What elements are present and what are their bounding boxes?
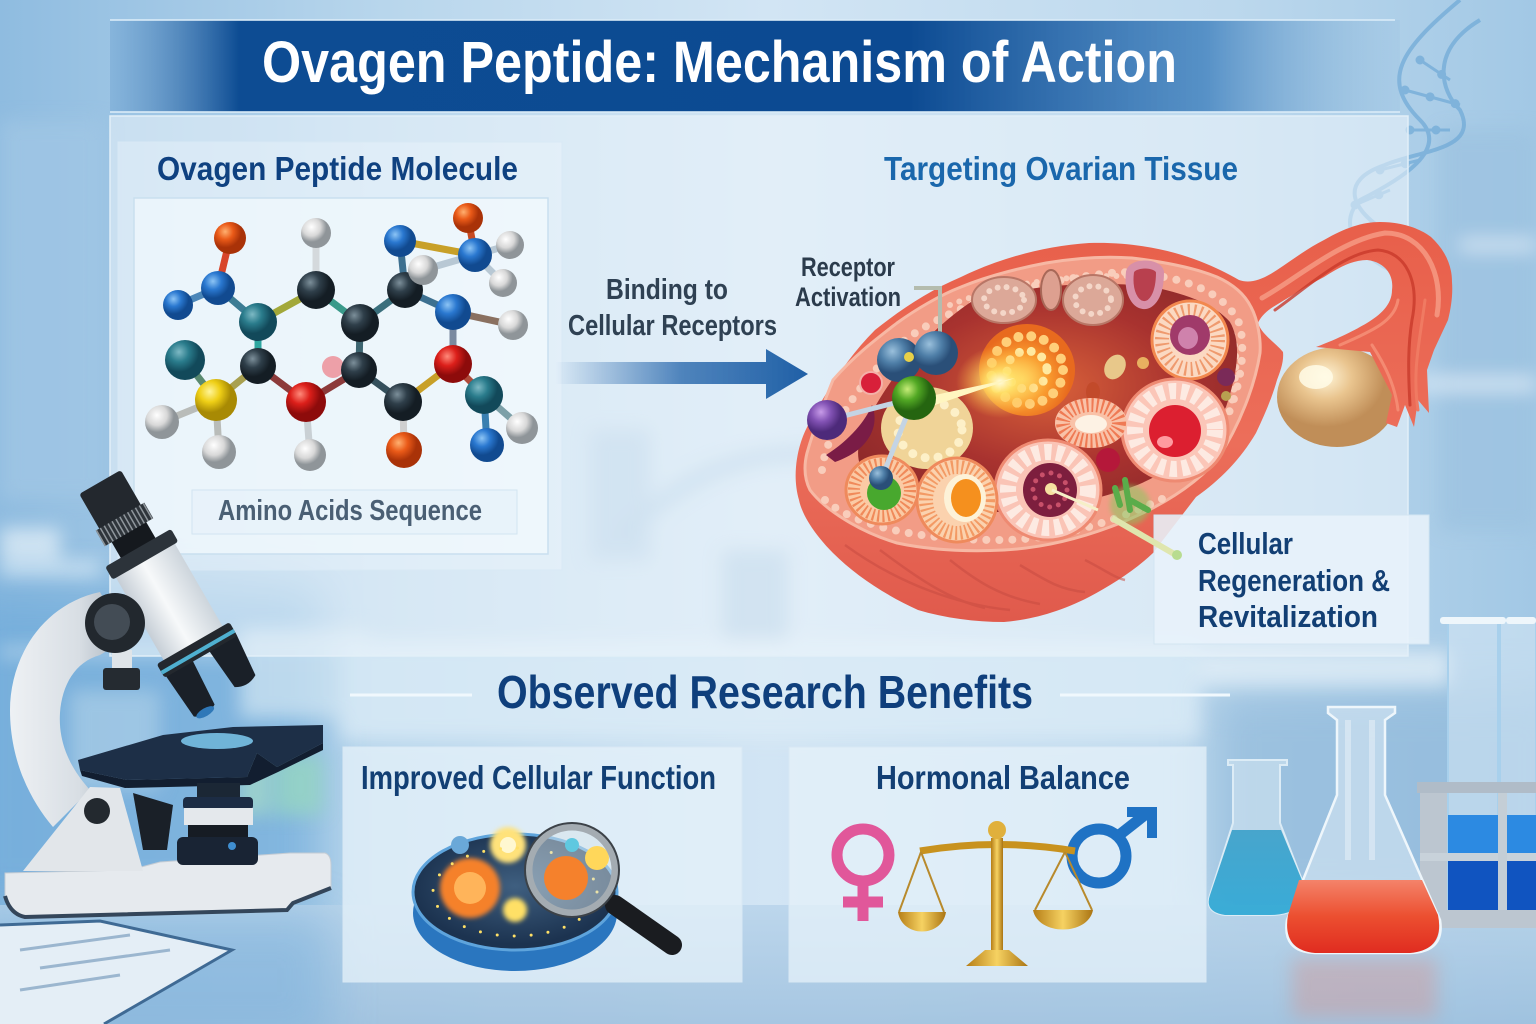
flask reflection (1292, 958, 1437, 1018)
panel: hormonal balance: Hormonal Balance (876, 759, 1130, 796)
objectives (165, 634, 264, 724)
icon: petri dish with magnifier (413, 823, 672, 971)
main glass panel (110, 116, 1408, 656)
heading: molecule: Ovagen Peptide Molecule (157, 150, 518, 187)
top follicles (972, 264, 1160, 325)
green core follicle (846, 456, 918, 524)
upper right follicle (1152, 301, 1228, 379)
regeneration sprout (1052, 480, 1150, 525)
heading: benefits: Observed Research Benefits (497, 666, 1033, 718)
focus gear (133, 793, 173, 850)
label: receptor activation: Receptor (801, 252, 895, 282)
central orange follicle (979, 324, 1075, 416)
coarse knob (85, 593, 145, 690)
label: binding: Cellular Receptors (568, 310, 777, 342)
eyepiece (79, 470, 142, 530)
panel: cellular function (343, 747, 742, 982)
title banner (110, 20, 1400, 112)
test tube rack (1417, 617, 1536, 928)
nosepiece (157, 622, 237, 678)
callout: regeneration: Regeneration & (1198, 563, 1390, 598)
base (5, 853, 331, 917)
icon: scales (898, 821, 1093, 966)
icon: female symbol (837, 829, 889, 921)
inner rim (805, 257, 1260, 551)
callout: regeneration: Cellular (1198, 526, 1293, 561)
foot (23, 787, 143, 871)
egg (1277, 347, 1397, 447)
DNA helix decoration (1350, 0, 1480, 270)
microscope (5, 461, 331, 917)
label: amino acids (192, 490, 517, 534)
receptor complex (807, 288, 1044, 490)
body (115, 541, 224, 664)
label: amino acids: Amino Acids Sequence (218, 495, 482, 527)
focus column (177, 783, 258, 865)
panel: peptide molecule (118, 142, 562, 570)
callout: regeneration (1112, 515, 1429, 644)
label: receptor activation (795, 252, 901, 312)
knurled ring (96, 503, 153, 546)
icon: male symbol (1072, 812, 1152, 883)
panel: hormonal balance (789, 747, 1206, 982)
orange core follicle (917, 458, 997, 542)
label: receptor activation: Activation (795, 282, 901, 312)
label: binding (568, 274, 777, 342)
cavity (858, 284, 1237, 512)
striped follicle (1055, 398, 1127, 448)
label: binding: Binding to (606, 274, 728, 306)
ovary illustration (796, 222, 1452, 622)
callout: regeneration: Revitalization (1198, 599, 1378, 634)
stage (78, 725, 323, 780)
small blue flask (1209, 760, 1304, 915)
arm (10, 592, 125, 827)
erlenmeyer flask with red liquid (1286, 707, 1441, 953)
tube highlights (1262, 233, 1438, 410)
tissue bubbles (822, 272, 1242, 540)
optical tube (64, 461, 264, 725)
title: Ovagen Peptide: Mechanism of Action (262, 30, 1177, 95)
red follicle (1122, 379, 1228, 481)
molecule model (145, 203, 538, 471)
panel: cellular function: Improved Cellular Function (361, 759, 716, 796)
ovary body and fallopian tube (796, 222, 1452, 622)
cream follicle (881, 387, 973, 469)
collar (105, 529, 178, 580)
heading: ovarian tissue: Targeting Ovarian Tissue (884, 150, 1238, 187)
neck (111, 520, 156, 560)
arrow: binding to tissue (555, 349, 808, 399)
bottom folds (845, 545, 1125, 610)
seeds (1086, 351, 1235, 402)
dark centre follicle (995, 440, 1101, 540)
clipboard (0, 921, 235, 1024)
